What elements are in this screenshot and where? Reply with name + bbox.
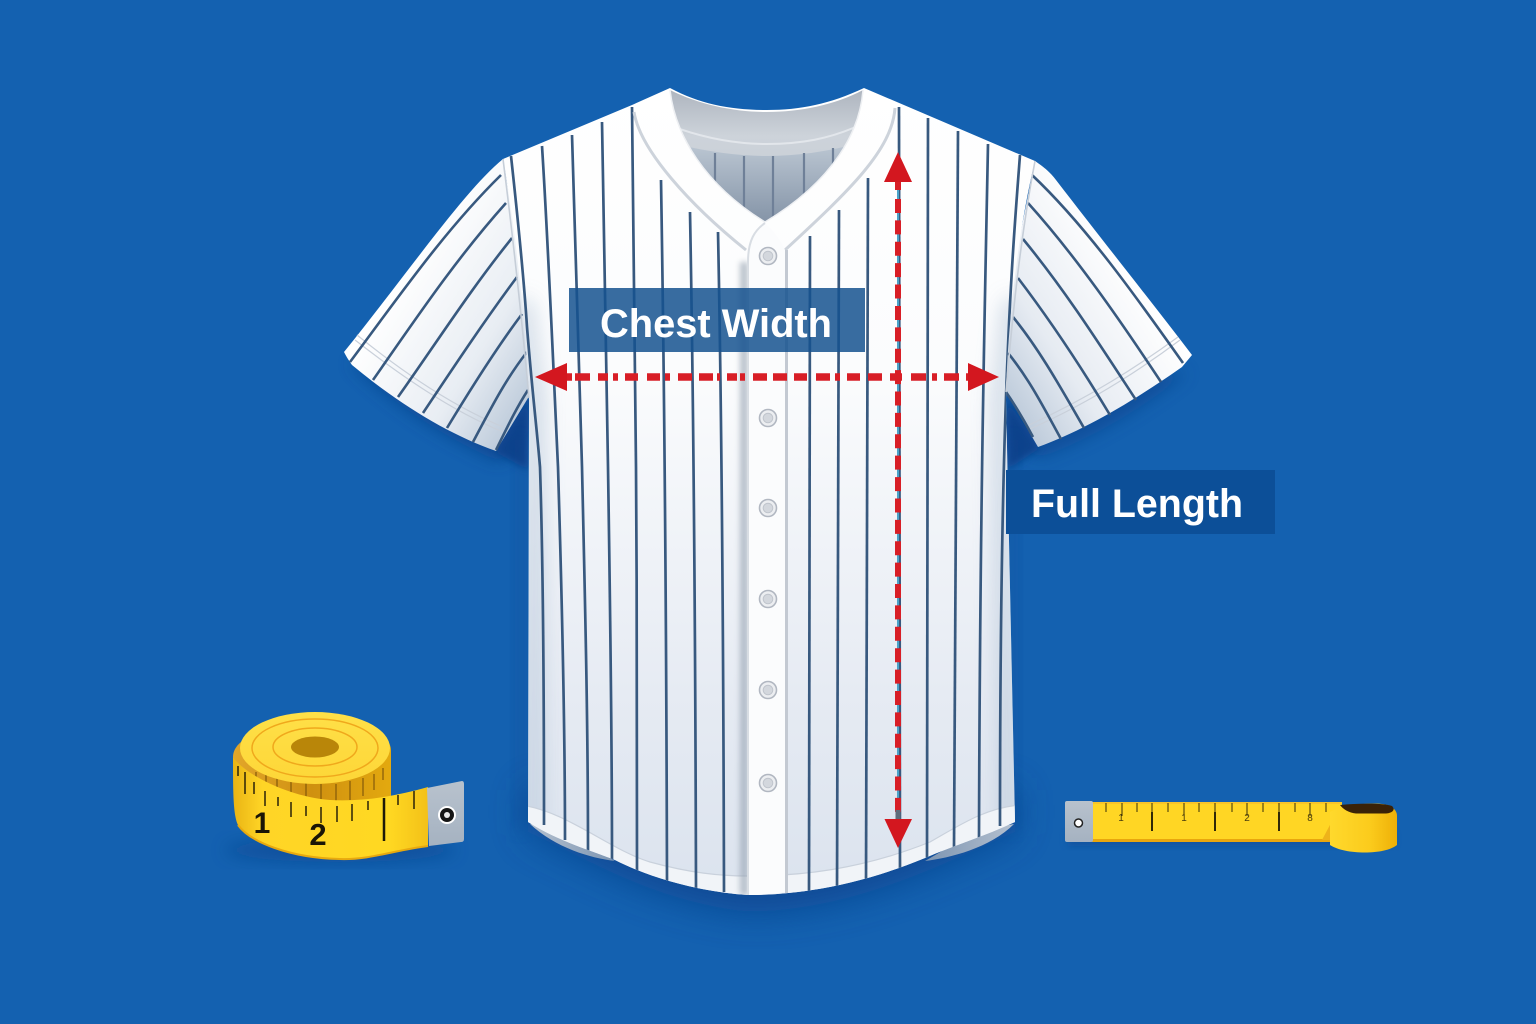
tape strip	[1092, 802, 1342, 842]
body pinstripes	[511, 107, 1020, 895]
icon: flat tape measure	[1065, 801, 1397, 852]
back hem left	[530, 824, 615, 861]
eyelet	[438, 806, 456, 824]
placket	[748, 223, 787, 895]
sleeve seam right	[1006, 161, 1035, 392]
inner back panel	[690, 147, 844, 221]
neck opening	[670, 90, 863, 230]
collar band	[634, 90, 895, 250]
arrow: full length vertical	[884, 152, 912, 848]
tape number 2: 2	[309, 817, 327, 852]
infographic canvas	[233, 88, 1397, 922]
ruler numbers: 8	[1307, 813, 1313, 824]
ruler numbers: 1	[1118, 813, 1124, 824]
sleeve seam left	[503, 159, 529, 398]
label: chest width	[569, 288, 865, 352]
tape front band	[233, 757, 428, 859]
metal tab	[427, 781, 464, 846]
label: chest width: Chest Width	[600, 302, 832, 346]
right sleeve	[1006, 161, 1192, 447]
ruler numbers: 1	[1181, 813, 1187, 824]
curl opening	[1340, 804, 1394, 814]
left sleeve	[344, 159, 528, 451]
icon: rolled tape measure	[225, 712, 464, 862]
jersey body	[503, 88, 1035, 900]
tape hole	[291, 736, 339, 758]
placket shadow	[740, 262, 748, 895]
arrow: chest width horizontal	[535, 363, 999, 391]
jersey	[225, 88, 1397, 900]
tape curl	[1330, 804, 1397, 852]
buttons	[760, 248, 776, 792]
back hem right	[925, 824, 1014, 861]
jersey drop shadow	[350, 362, 1188, 912]
ruler ticks	[1106, 803, 1326, 816]
ruler numbers: 2	[1244, 813, 1250, 824]
label: full length: Full Length	[1031, 482, 1243, 526]
tape top face	[240, 712, 390, 784]
hem band	[520, 805, 1020, 900]
label: full length	[1006, 470, 1275, 534]
tape number 1: 1	[254, 807, 270, 840]
tape layered edge	[233, 723, 391, 806]
metal end	[1065, 801, 1093, 842]
tape ticks	[238, 766, 414, 823]
ruler numbers	[1118, 813, 1313, 824]
